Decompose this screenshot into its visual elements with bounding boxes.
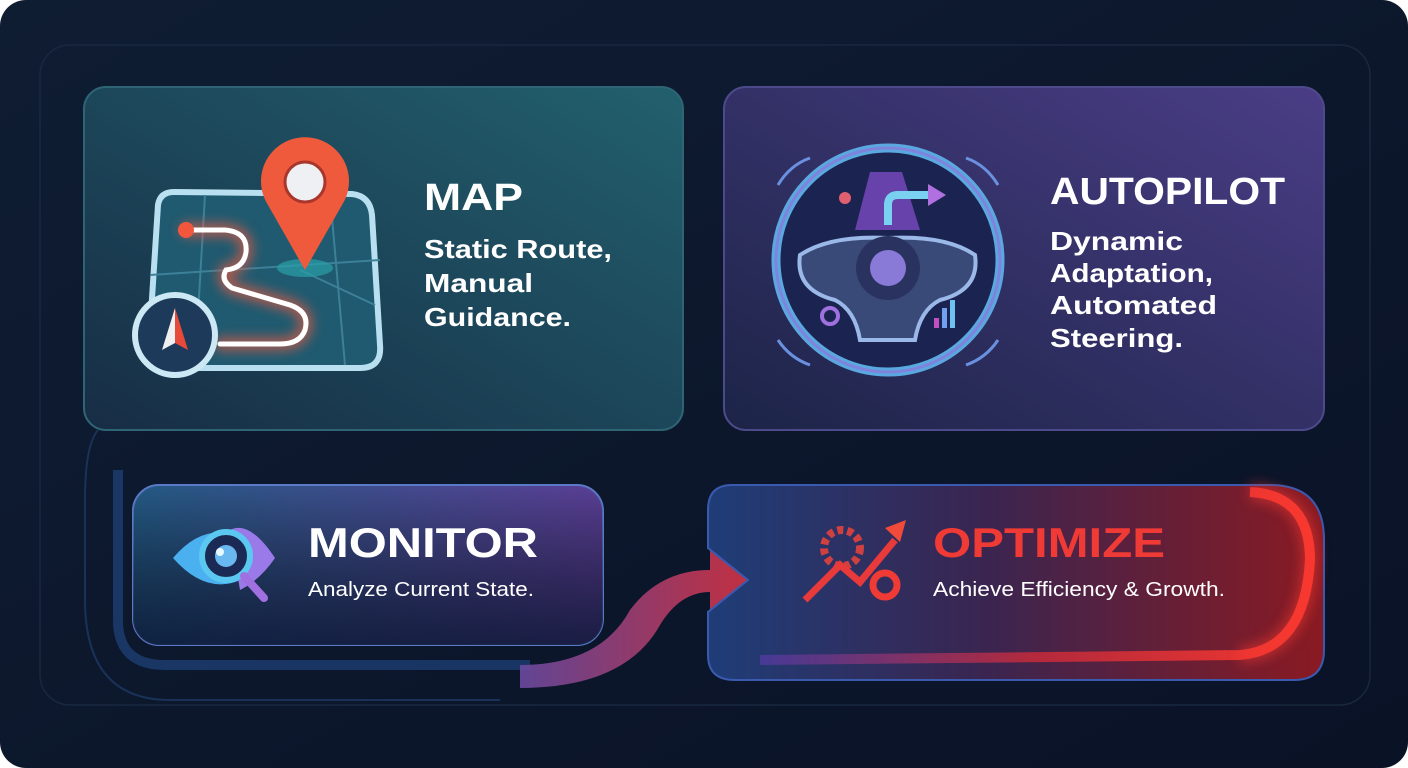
text: map description: Manual (424, 268, 533, 298)
panel: optimize (708, 485, 1324, 680)
icon: growth gears (805, 520, 906, 600)
heading: MONITOR: MONITOR (308, 519, 538, 566)
text: map description: Static Route, (424, 234, 612, 264)
heading: MAP: MAP (424, 177, 523, 219)
icon: eye with magnifier (173, 528, 275, 598)
panel: monitor (133, 485, 603, 645)
text: optimize description: Achieve Efficiency & Growth. (933, 579, 1225, 601)
text: autopilot description: Steering. (1050, 323, 1183, 353)
arrow: flow from monitor to optimize (85, 430, 770, 700)
text: map description: Guidance. (424, 302, 571, 332)
text: autopilot description: Dynamic (1050, 226, 1183, 256)
icon: steering wheel (776, 148, 1000, 372)
text: autopilot description: Automated (1050, 290, 1217, 320)
text: autopilot description: Adaptation, (1050, 258, 1213, 288)
icon: map (135, 137, 380, 375)
text: monitor description: Analyze Current State. (308, 579, 534, 601)
panel: map (84, 87, 683, 430)
heading: AUTOPILOT: AUTOPILOT (1050, 171, 1285, 213)
heading: OPTIMIZE: OPTIMIZE (933, 519, 1165, 566)
panel: autopilot (724, 87, 1324, 430)
